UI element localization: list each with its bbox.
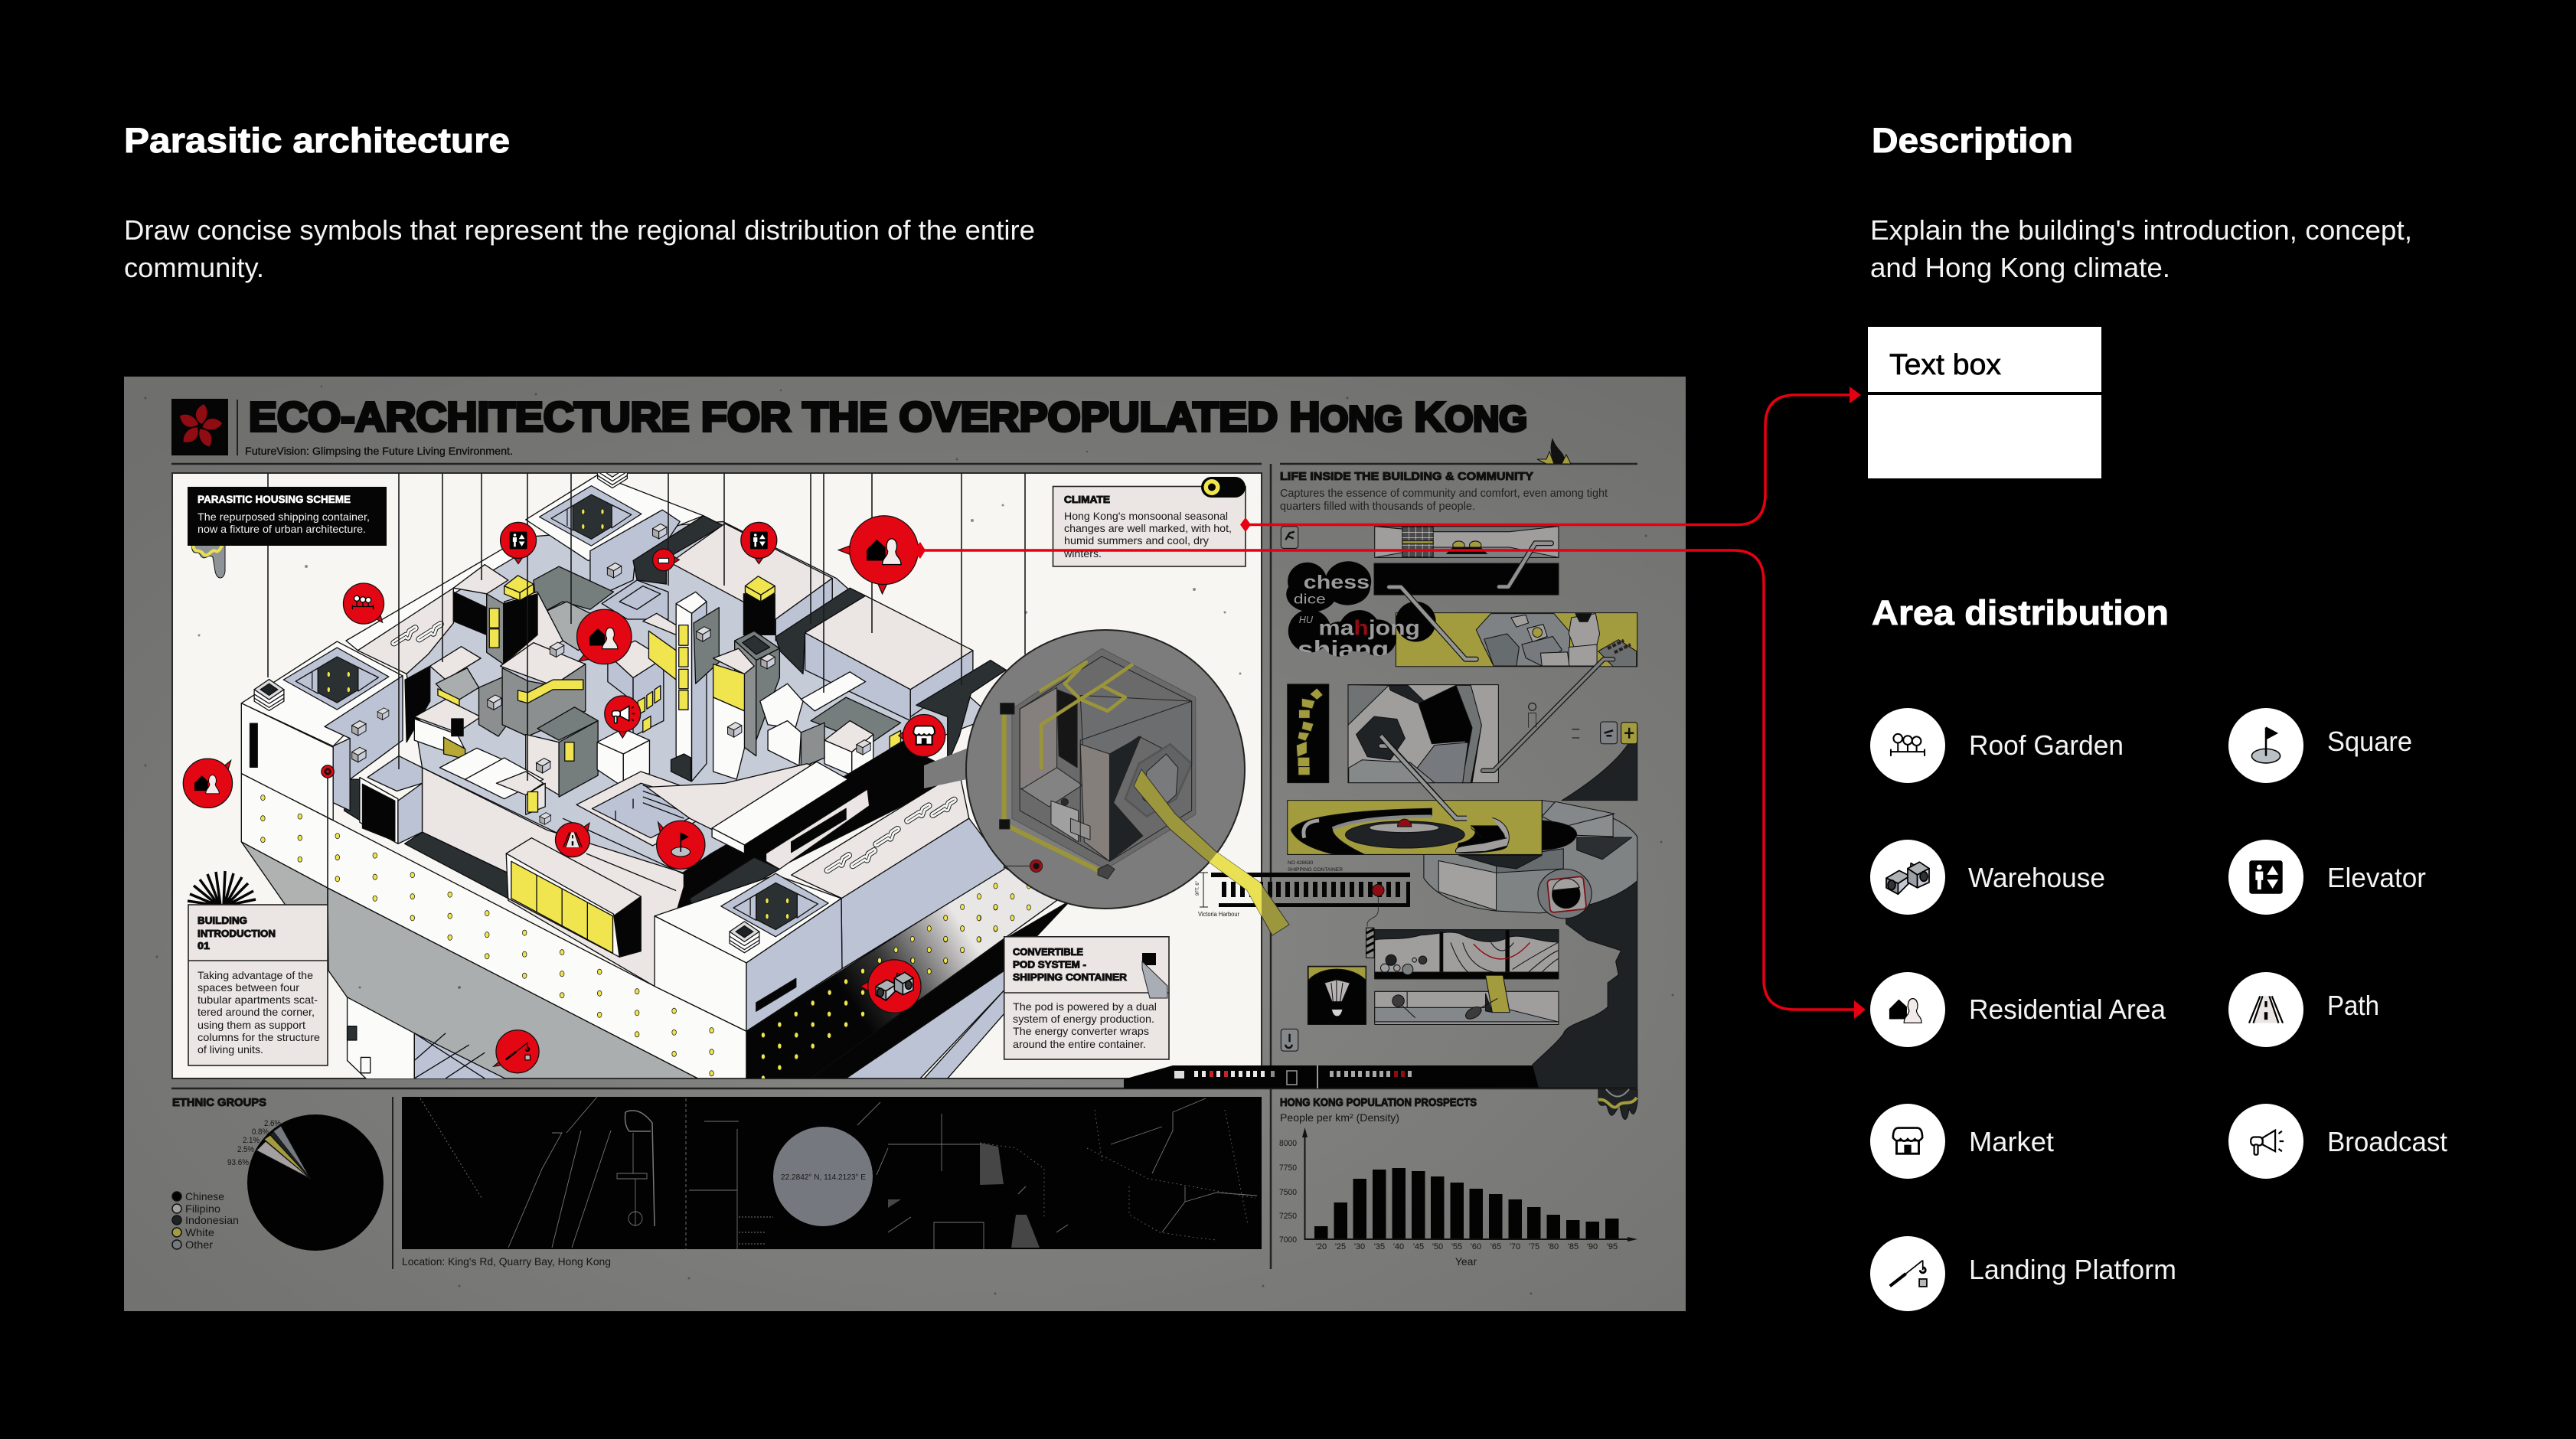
text block: left description bbox=[124, 214, 1035, 283]
pin: warehouse bbox=[860, 960, 921, 1013]
small signage icons bbox=[1529, 703, 1637, 744]
pin: square bbox=[657, 821, 705, 870]
map patches bbox=[888, 1143, 1040, 1248]
y axis labels: 7500 bbox=[1279, 1188, 1297, 1197]
legend item: path bbox=[2228, 972, 2379, 1047]
grate: Victoria Harbour: Victoria Harbour bbox=[1198, 911, 1239, 918]
map lines bbox=[420, 1097, 1257, 1249]
icon: flame top right bbox=[1537, 438, 1571, 464]
badminton panel bbox=[1375, 975, 1559, 1024]
text block: life inside: Captures the essence of community and comfort, even among tight bbox=[1280, 488, 1608, 500]
callout: convertible pod system: system of energy production. bbox=[1013, 1013, 1154, 1025]
right tall white tower bbox=[608, 592, 719, 781]
callout: building introduction: tubular apartments scat- bbox=[198, 994, 318, 1006]
legend item: broadcast: Broadcast bbox=[2327, 1126, 2447, 1157]
bubble: game words: HU bbox=[1299, 615, 1314, 625]
pin: residential large bbox=[838, 516, 918, 594]
legend item: residential area: Residential Area bbox=[1969, 994, 2166, 1025]
callout: convertible pod system: SHIPPING CONTAINER bbox=[1013, 971, 1128, 983]
callout: convertible pod system: The energy converter wraps bbox=[1013, 1025, 1149, 1037]
poster title: ECO-ARCHITECTURE FOR THE OVERPOPULATED H ONG KONG bbox=[249, 394, 1527, 440]
legend item: roof garden bbox=[1870, 708, 2124, 783]
sunken plaza bbox=[576, 771, 696, 847]
text block: left description: community. bbox=[124, 252, 264, 283]
bubble: game words: chess bbox=[1304, 572, 1370, 593]
x axis labels: '30 bbox=[1354, 1242, 1365, 1251]
callout: convertible pod system: The pod is powered by a dual bbox=[1013, 1000, 1157, 1013]
shipping containers along upper edge bbox=[633, 516, 1006, 764]
callout: parasitic housing scheme bbox=[188, 487, 387, 578]
legend item: market: Market bbox=[1969, 1126, 2054, 1157]
callout: building introduction: columns for the structure bbox=[198, 1031, 320, 1043]
pin: roof garden bbox=[343, 583, 384, 624]
callout: climate: winters. bbox=[1063, 547, 1102, 560]
callout: climate: humid summers and cool, dry bbox=[1064, 534, 1209, 547]
right column small labels bbox=[1288, 860, 1343, 873]
callout: climate: CLIMATE bbox=[1064, 494, 1110, 505]
bubble: game words: dice bbox=[1294, 592, 1326, 607]
axes bbox=[1302, 1127, 1637, 1242]
callout: convertible pod system bbox=[1004, 937, 1169, 1059]
legend: area distribution bbox=[1870, 708, 2447, 1311]
legend item: market bbox=[1870, 1104, 2054, 1179]
panel: interior hexagon bbox=[1348, 685, 1498, 783]
map location circle: 22.2842° N, 114.2123° E bbox=[781, 1173, 866, 1182]
pie legend: Indonesian bbox=[185, 1214, 239, 1226]
pie labels: 2.6% bbox=[264, 1119, 281, 1128]
x axis labels: '45 bbox=[1413, 1242, 1424, 1251]
callout: building introduction: using them as support bbox=[198, 1019, 305, 1031]
long escalators bbox=[1381, 659, 1613, 818]
heading: Parasitic architecture: Parasitic architecture bbox=[124, 121, 510, 160]
pie labels: 2.1% bbox=[243, 1136, 260, 1145]
x axis labels: '95 bbox=[1607, 1242, 1618, 1251]
legend item: landing platform: Landing Platform bbox=[1969, 1254, 2176, 1285]
long pink wall bbox=[405, 768, 686, 987]
central gray block with yellow band bbox=[488, 642, 586, 736]
pie labels: 2.5% bbox=[237, 1145, 254, 1154]
legend item: broadcast bbox=[2228, 1104, 2447, 1179]
panel: isometric building section bbox=[172, 457, 1410, 1081]
left corner tower bbox=[241, 641, 403, 821]
pie legend: White bbox=[185, 1226, 214, 1238]
pod red marker bbox=[1004, 860, 1043, 873]
legend item: warehouse bbox=[1870, 840, 2105, 915]
grate: Victoria Harbour: 9FT. 6" bbox=[1196, 881, 1200, 896]
platform floor bbox=[346, 521, 992, 892]
speckle texture bbox=[144, 386, 1673, 1294]
y axis labels: 7250 bbox=[1279, 1212, 1297, 1221]
legend item: roof garden: Roof Garden bbox=[1969, 729, 2124, 761]
yellow panel block bbox=[506, 838, 641, 957]
x axis labels: '90 bbox=[1587, 1242, 1598, 1251]
legend item: landing platform bbox=[1870, 1236, 2176, 1311]
legend item: elevator: Elevator bbox=[2327, 862, 2426, 893]
pin: small market bbox=[653, 549, 679, 571]
callout: convertible pod system: CONVERTIBLE bbox=[1013, 946, 1083, 958]
x axis labels: '20 bbox=[1316, 1242, 1327, 1251]
energy belt bbox=[1134, 769, 1289, 935]
icon pins on building bbox=[183, 516, 945, 1073]
escalators bbox=[1389, 543, 1551, 659]
x axis labels: '70 bbox=[1510, 1242, 1520, 1251]
pie legend: Other bbox=[185, 1238, 213, 1251]
callout: climate: changes are well marked, with hot, bbox=[1064, 522, 1232, 534]
x axis labels bbox=[1316, 1242, 1618, 1251]
shuttlecock panel bbox=[1308, 966, 1366, 1024]
text box sample bbox=[1868, 327, 2101, 478]
panel: ethnic groups pie chart bbox=[172, 1097, 384, 1251]
curtain panel with curves bbox=[1366, 892, 1559, 979]
x axis labels: '75 bbox=[1529, 1242, 1539, 1251]
y axis labels: 7000 bbox=[1279, 1235, 1297, 1245]
legend item: square bbox=[2228, 708, 2412, 783]
x axis labels: '40 bbox=[1393, 1242, 1404, 1251]
legend item: warehouse: Warehouse bbox=[1968, 862, 2105, 893]
olive panel: mahjong tiles bbox=[1396, 613, 1637, 667]
text block: life inside: quarters filled with thousands of people. bbox=[1280, 501, 1475, 513]
pie legend: Chinese bbox=[185, 1190, 224, 1202]
callout: building introduction: spaces between four bbox=[198, 981, 299, 994]
heading: life inside: LIFE INSIDE THE BUILDING & COMMUNITY bbox=[1280, 471, 1533, 483]
isometric building drawing bbox=[241, 457, 1070, 1081]
panel: poster bbox=[124, 377, 1686, 1311]
pin: market bbox=[899, 714, 945, 757]
black panel: stacked cubes bbox=[1288, 684, 1329, 783]
heading: population prospects: HONG KONG POPULATION PROSPECTS bbox=[1280, 1097, 1477, 1109]
black service strip and beam bbox=[646, 741, 935, 908]
text block: left description: Draw concise symbols that represent the regional distribution of the entire bbox=[124, 214, 1035, 246]
map location circle bbox=[773, 1127, 873, 1226]
pin: red ring marker bbox=[322, 765, 334, 778]
pin: elevator one bbox=[501, 522, 537, 564]
callout: climate: Hong Kong's monsoonal seasonal bbox=[1064, 510, 1228, 522]
pin: elevator two bbox=[741, 522, 777, 564]
lower structure bbox=[241, 842, 698, 1080]
band dots bbox=[261, 795, 713, 1076]
pie labels: 0.8% bbox=[252, 1127, 269, 1137]
lens: shipping container pod detail bbox=[924, 630, 1245, 909]
pin: path bbox=[556, 823, 589, 857]
callout: building introduction: Taking advantage of the bbox=[198, 969, 313, 981]
legend item: path: Path bbox=[2327, 990, 2379, 1021]
top panel: go board and buttons bbox=[1375, 527, 1559, 557]
right column small labels: NO 428630 bbox=[1288, 860, 1314, 866]
right tower two bbox=[697, 576, 901, 779]
bars bbox=[1314, 1168, 1618, 1239]
location caption: Location: King's Rd, Quarry Bay, Hong Kong bbox=[402, 1255, 611, 1268]
panel: population prospects bar chart bbox=[1279, 1097, 1637, 1268]
lower central blocks bbox=[439, 707, 649, 824]
text box sample: Text box bbox=[1889, 349, 2001, 381]
dark smoke backdrop bbox=[1533, 728, 1637, 1088]
central left blocks bbox=[414, 565, 668, 759]
legend item: square: Square bbox=[2327, 726, 2412, 757]
grate: Victoria Harbour bbox=[1196, 873, 1410, 918]
callout: convertible pod system: around the entire container. bbox=[1013, 1038, 1146, 1050]
callout: building introduction: BUILDING bbox=[198, 915, 247, 926]
poster logo: Hong Kong bauhinia bbox=[171, 399, 228, 455]
arrow: residential pin to area distribution bbox=[913, 542, 1866, 1019]
callout: parasitic housing scheme: PARASITIC HOUSING SCHEME bbox=[198, 494, 351, 505]
callout: building introduction: 01 bbox=[198, 940, 210, 951]
x axis labels: '35 bbox=[1374, 1242, 1385, 1251]
top tower with courtyard bbox=[525, 473, 704, 591]
pie labels bbox=[227, 1119, 281, 1167]
callout: parasitic housing scheme: The repurposed shipping container, bbox=[198, 511, 370, 523]
lower right strip and wall bbox=[655, 772, 1070, 1081]
bubble: game words: mahjong bbox=[1318, 616, 1420, 640]
heading: ethnic groups: ETHNIC GROUPS bbox=[172, 1097, 266, 1109]
heading: Description: Description bbox=[1872, 121, 2073, 160]
callout: building introduction bbox=[188, 871, 328, 1065]
x axis labels: '80 bbox=[1548, 1242, 1559, 1251]
pie legend: Filipino bbox=[185, 1202, 220, 1215]
pie chart bbox=[247, 1114, 384, 1251]
legend item: elevator bbox=[2228, 840, 2426, 915]
poster subtitle: FutureVision: Glimpsing the Future Living Environment. bbox=[245, 445, 513, 457]
x axis labels: '85 bbox=[1568, 1242, 1579, 1251]
right column small labels: SHIPPING CONTAINER bbox=[1288, 867, 1343, 873]
dotted white band bbox=[241, 774, 746, 1078]
text block: right description: Explain the building's introduction, concept, bbox=[1870, 214, 2412, 246]
text block: life inside bbox=[1280, 488, 1608, 513]
callout: convertible pod system: POD SYSTEM - bbox=[1013, 958, 1086, 971]
callout: building introduction: of living units. bbox=[198, 1043, 263, 1056]
illustrated game panels bbox=[1281, 527, 1637, 818]
x axis labels: '65 bbox=[1490, 1242, 1501, 1251]
x axis labels: '25 bbox=[1335, 1242, 1346, 1251]
arrow: climate to text box bbox=[1240, 387, 1861, 532]
y axis labels: 7750 bbox=[1279, 1163, 1297, 1173]
y axis labels: 8000 bbox=[1279, 1139, 1297, 1148]
text block: right description bbox=[1870, 214, 2412, 283]
pie legend bbox=[172, 1190, 239, 1251]
callout: climate bbox=[1053, 477, 1246, 566]
axis title: People per km² (Density) bbox=[1280, 1111, 1399, 1124]
pie labels: 93.6% bbox=[227, 1158, 249, 1167]
panel: life inside the building bbox=[1124, 471, 1637, 1119]
yellow top tower one bbox=[487, 576, 537, 664]
pin: landing platform bbox=[494, 1030, 539, 1073]
pin: residential centre bbox=[577, 609, 632, 664]
x axis labels: '55 bbox=[1451, 1242, 1462, 1251]
bubble: game words bbox=[1286, 561, 1436, 663]
x axis labels: '60 bbox=[1471, 1242, 1481, 1251]
pin: broadcast bbox=[605, 696, 641, 738]
callout: parasitic housing scheme: now a fixture of urban architecture. bbox=[198, 523, 366, 535]
bubble: game words: shiang bbox=[1298, 635, 1389, 663]
callout: building introduction: INTRODUCTION bbox=[198, 928, 276, 939]
legend item: residential area bbox=[1870, 972, 2166, 1047]
elevation lines bbox=[268, 473, 1025, 905]
pin: residential left bbox=[183, 759, 233, 808]
panel: location map bbox=[402, 1097, 1262, 1268]
heading: Area distribution: Area distribution bbox=[1872, 593, 2169, 632]
x axis labels: '50 bbox=[1432, 1242, 1443, 1251]
decoration: lower drip bbox=[1598, 1089, 1637, 1119]
text block: right description: and Hong Kong climate. bbox=[1870, 252, 2170, 283]
y axis labels bbox=[1279, 1139, 1297, 1245]
callout: building introduction: tered around the corner, bbox=[198, 1006, 315, 1018]
x axis title: Year bbox=[1455, 1255, 1477, 1268]
bottom black strip bbox=[1124, 1065, 1539, 1088]
ring building and olive disc panel bbox=[1281, 736, 1637, 1051]
roof edge and pink terrace bbox=[346, 541, 526, 742]
front door block bbox=[344, 756, 423, 843]
